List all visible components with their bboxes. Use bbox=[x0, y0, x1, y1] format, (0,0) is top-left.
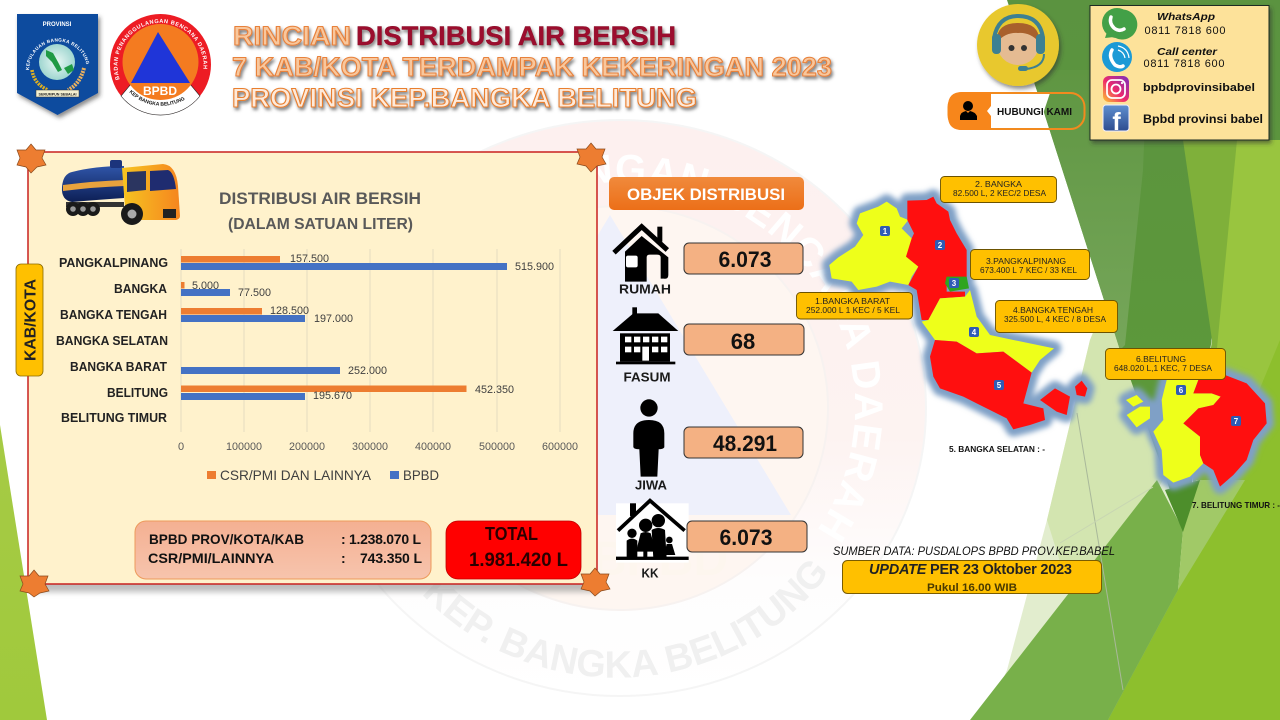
bar chart: 0 bbox=[178, 441, 184, 453]
logo: BPBD Kep. Bangka Belitung: BPBD bbox=[143, 84, 177, 98]
icon: family in house bbox=[616, 501, 689, 563]
value: kk bbox=[687, 521, 807, 552]
map label: belitung: 6.BELITUNG bbox=[1136, 354, 1186, 364]
title: 7 KAB/KOTA TERDAMPAK KEKERINGAN 2023 bbox=[232, 52, 832, 82]
bar chart: 77.500 bbox=[238, 287, 271, 299]
text: facebook handle: Bpbd provinsi babel bbox=[1143, 114, 1263, 126]
chart title bbox=[219, 189, 421, 233]
value: fasum bbox=[684, 324, 804, 355]
value: fasum: 68 bbox=[731, 329, 755, 354]
bar chart: 452.350 bbox=[475, 384, 514, 396]
text: call center: 0811 7818 600 bbox=[1144, 58, 1224, 70]
bar chart: 500000 bbox=[479, 441, 515, 453]
bar chart: 300000 bbox=[352, 441, 388, 453]
icon: facebook: f bbox=[1112, 108, 1121, 136]
chart legend bbox=[207, 467, 439, 483]
bar chart: 600000 bbox=[542, 441, 578, 453]
value: jiwa: 48.291 bbox=[713, 431, 777, 456]
value: rumah: 6.073 bbox=[718, 247, 772, 272]
text: whatsapp bbox=[1144, 11, 1226, 37]
watermark: BPBD emblem: BPBD bbox=[592, 533, 728, 586]
logo: Provinsi Kepulauan Bangka Belitung shield bbox=[16, 14, 103, 120]
map label: pangkalpinang bbox=[970, 250, 1090, 280]
source note: SUMBER DATA: PUSDALOPS BPBD PROV.KEP.BABEL bbox=[833, 546, 1115, 558]
bar chart: 400000 bbox=[415, 441, 451, 453]
bar chart: PANGKALPINANG bbox=[59, 256, 168, 270]
summary box: BPBD and CSR totals: BPBD PROV/KOTA/KAB bbox=[149, 531, 304, 547]
title bbox=[232, 21, 832, 113]
map label: bangka barat bbox=[796, 292, 912, 319]
icon: person bbox=[633, 399, 664, 477]
map: Pulau Belitung bbox=[1126, 375, 1267, 487]
chart legend: CSR/PMI DAN LAINNYA bbox=[220, 467, 372, 483]
chart title: (DALAM SATUAN LITER) bbox=[228, 216, 413, 233]
title: DISTRIBUSI AIR BERSIH bbox=[356, 21, 676, 51]
summary box: BPBD and CSR totals bbox=[135, 521, 431, 579]
map number badges: 6 bbox=[1179, 386, 1184, 395]
label: KAB/KOTA: KAB/KOTA bbox=[22, 279, 40, 361]
text: call center bbox=[1144, 46, 1224, 70]
map label: bangka: 82.500 L, 2 KEC/2 DESA bbox=[953, 188, 1046, 198]
button: hubungi kami bbox=[948, 92, 1084, 130]
logo: BPBD Kep. Bangka Belitung: BADAN PENANGGULANGAN BENCANA DAERAH bbox=[114, 18, 208, 80]
map number badges: 2 bbox=[938, 241, 943, 250]
summary box: BPBD and CSR totals: 743.350 L bbox=[360, 550, 422, 566]
summary box: BPBD and CSR totals: : 1.238.070 L bbox=[341, 531, 421, 547]
bar chart: 252.000 bbox=[348, 365, 387, 377]
background: green geometric shapes right bbox=[970, 0, 1280, 720]
value: rumah bbox=[684, 243, 803, 274]
bar chart: BANGKA SELATAN bbox=[56, 334, 168, 348]
callout: total: 1.981.420 L bbox=[469, 550, 568, 571]
map label: bangka tengah bbox=[996, 300, 1118, 332]
panel: objek distribusi bbox=[609, 177, 807, 580]
heading: objek distribusi: OBJEK DISTRIBUSI bbox=[627, 185, 785, 204]
logo: Provinsi Kepulauan Bangka Belitung shield: KEPULAUAN BANGKA BELITUNG bbox=[26, 38, 90, 70]
watermark: BPBD emblem: BADAN PENANGGULANGAN BENCANA DAERAH bbox=[598, 154, 882, 506]
label: fasum: FASUM bbox=[624, 370, 670, 384]
bar chart: 197.000 bbox=[314, 313, 353, 325]
bar chart bbox=[56, 249, 578, 483]
callout: total bbox=[446, 521, 581, 579]
callout: total: TOTAL bbox=[485, 524, 538, 544]
map label: pangkalpinang: 673.400 L 7 KEC / 33 KEL bbox=[980, 265, 1077, 275]
bar chart: 100000 bbox=[226, 441, 262, 453]
bar chart: BANGKA BARAT bbox=[70, 360, 167, 374]
text: call center: Call center bbox=[1157, 46, 1218, 58]
watermark: BPBD emblem bbox=[386, 119, 927, 697]
value: kk: 6.073 bbox=[720, 525, 772, 550]
bar chart: BANGKA bbox=[114, 282, 167, 296]
map number badges: 4 bbox=[972, 328, 977, 337]
summary box: BPBD and CSR totals: CSR/PMI/LAINNYA bbox=[148, 550, 274, 566]
map label: belitung: 648.020 L,1 KEC, 7 DESA bbox=[1114, 363, 1212, 373]
map label: bangka selatan: 5. BANGKA SELATAN : - bbox=[949, 444, 1045, 454]
logo: BPBD Kep. Bangka Belitung: KEP BANGKA BELITUNG bbox=[129, 90, 184, 106]
map number badges: 5 bbox=[997, 381, 1002, 390]
logo: Provinsi Kepulauan Bangka Belitung shield: PROVINSI bbox=[43, 22, 72, 28]
title: RINCIAN bbox=[233, 21, 351, 51]
update box: UPDATE PER 23 Oktober 2023 bbox=[869, 562, 1072, 578]
icon: facebook bbox=[1103, 105, 1129, 136]
map label: pangkalpinang: 3.PANGKALPINANG bbox=[986, 256, 1066, 266]
panel: distribusi air bersih bbox=[16, 152, 597, 592]
map number badges: 7 bbox=[1234, 417, 1239, 426]
text: whatsapp: 0811 7818 600 bbox=[1144, 25, 1226, 37]
bar chart: 515.900 bbox=[515, 261, 554, 273]
map label: bangka barat: 1.BANGKA BARAT bbox=[815, 296, 890, 306]
map label: bangka tengah: 4.BANGKA TENGAH bbox=[1013, 305, 1093, 315]
bar chart: 200000 bbox=[289, 441, 325, 453]
icon: water tanker truck bbox=[62, 160, 180, 225]
text: whatsapp: WhatsApp bbox=[1157, 11, 1216, 23]
logo: Provinsi Kepulauan Bangka Belitung shield: SERUMPUN SEBALAI bbox=[38, 92, 76, 96]
text: instagram handle: bpbdprovinsibabel bbox=[1143, 82, 1255, 94]
watermark: BPBD emblem: KEP. BANGKA BELITUNG bbox=[423, 562, 825, 678]
panel: contact box bbox=[1090, 6, 1269, 140]
map label: bangka tengah: 325.500 L, 4 KEC / 8 DESA bbox=[1004, 314, 1106, 324]
icon: public facility building bbox=[613, 307, 678, 364]
map label: belitung bbox=[1106, 348, 1226, 380]
label: rumah: RUMAH bbox=[619, 282, 671, 296]
icon: instagram bbox=[1103, 76, 1129, 102]
label: kk: KK bbox=[642, 566, 658, 580]
map number badges bbox=[880, 226, 1241, 426]
update box: Pukul 16.00 WIB bbox=[927, 582, 1017, 594]
logo: BPBD Kep. Bangka Belitung bbox=[110, 14, 211, 116]
label: KAB/KOTA bbox=[16, 264, 43, 376]
bar chart: 157.500 bbox=[290, 253, 329, 265]
update box bbox=[842, 560, 1102, 594]
background: green wedge left bbox=[0, 425, 47, 720]
bar chart: BELITUNG bbox=[107, 386, 168, 400]
chart legend: BPBD bbox=[403, 467, 439, 483]
bar chart: 195.670 bbox=[313, 390, 352, 402]
bar chart: 5.000 bbox=[192, 280, 219, 292]
bar chart: BELITUNG TIMUR bbox=[61, 411, 167, 425]
decorative corner stars bbox=[17, 143, 610, 597]
icon: call center phone bbox=[1102, 42, 1132, 72]
value: jiwa bbox=[684, 427, 803, 458]
bar chart: BANGKA TENGAH bbox=[60, 308, 167, 322]
map number badges: 3 bbox=[952, 279, 957, 288]
bar chart: 128.500 bbox=[270, 305, 309, 317]
chart title: DISTRIBUSI AIR BERSIH bbox=[219, 189, 421, 208]
title: PROVINSI KEP.BANGKA BELITUNG bbox=[232, 83, 697, 113]
map label: bangka: 2. BANGKA bbox=[975, 179, 1022, 189]
button: hubungi kami: HUBUNGI KAMI bbox=[997, 107, 1072, 118]
map label: bangka barat: 252.000 L 1 KEC / 5 KEL bbox=[806, 305, 900, 315]
summary box: BPBD and CSR totals: : bbox=[341, 550, 346, 566]
map: Pulau Bangka bbox=[829, 197, 1087, 429]
heading: objek distribusi bbox=[609, 177, 804, 210]
map label: bangka bbox=[940, 176, 1056, 202]
icon: house bbox=[614, 227, 668, 282]
label: jiwa: JIWA bbox=[635, 478, 667, 492]
icon: customer service agent bbox=[977, 4, 1059, 86]
map number badges: 1 bbox=[883, 227, 888, 236]
icon: whatsapp bbox=[1102, 8, 1137, 40]
